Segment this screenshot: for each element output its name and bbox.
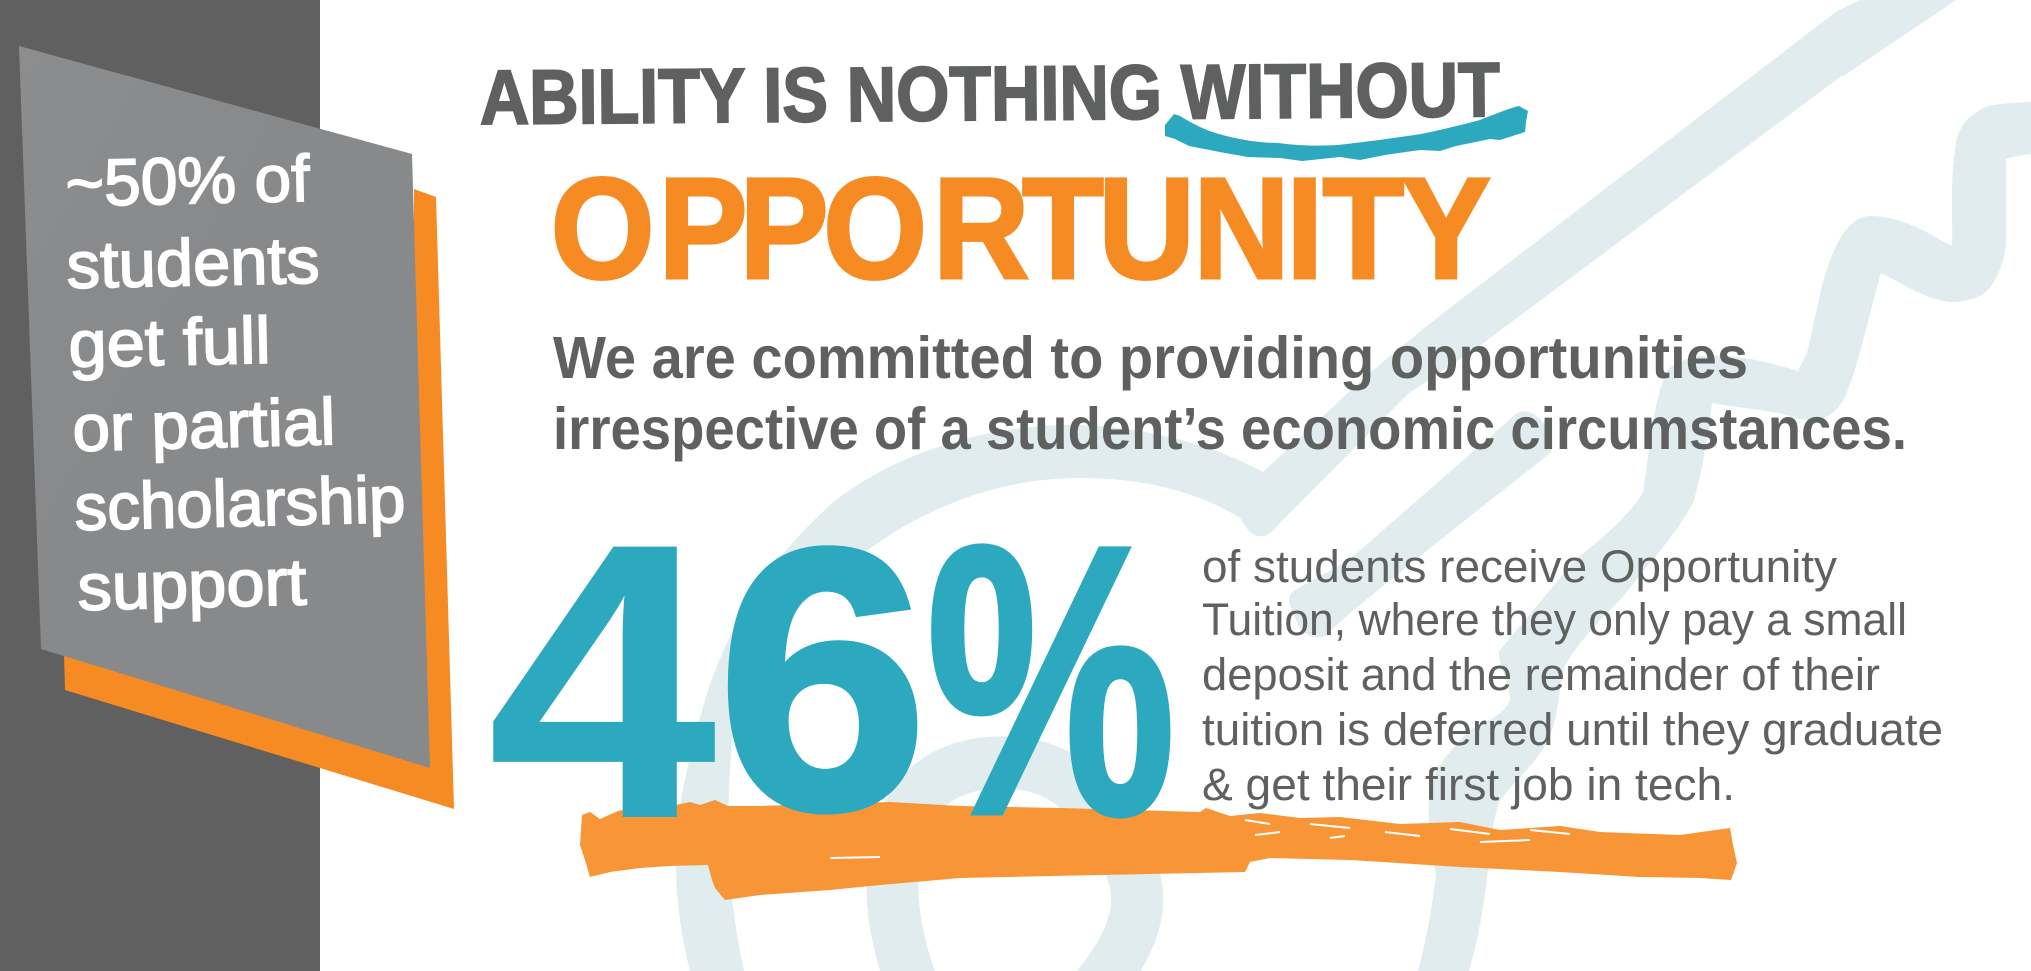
big statistic: 46%: 6 [717,471,928,887]
background stroke: diagonal line [1289,411,1553,638]
background stroke: large tick and arc [676,0,1956,971]
gray callout panel [19,46,430,768]
callout text: 50% scholarship support: scholarship [74,462,406,544]
commitment statement [553,325,1907,462]
callout text: 50% scholarship support: support [77,544,307,624]
teal brush underline [1165,106,1528,161]
opportunity tuition description: Tuition, where they only pay a small [1202,594,1907,645]
commitment statement: We are committed to providing opportunities [553,325,1748,391]
background stroke: inner loop [892,762,1137,971]
callout text: 50% scholarship support: ~50% of [65,141,311,220]
heading: opportunity: OPPORTUNITY [551,149,1491,309]
big statistic: 46%: 4 [487,462,720,901]
opportunity tuition description: tuition is deferred until they graduate [1202,704,1943,755]
opportunity tuition description: of students receive Opportunity [1202,541,1838,592]
callout text: 50% scholarship support: or partial [71,384,336,465]
big statistic: 46%: % [926,466,1176,895]
orange brush underline [580,800,1737,900]
callout text: 50% scholarship support: students [66,223,320,302]
background: hand-drawn chart lines [676,0,2031,971]
left dark panel [0,0,320,971]
heading: ability is nothing without: ABILITY IS NOTHING WITHOUT [479,47,1500,141]
opportunity tuition description: deposit and the remainder of their [1202,649,1880,700]
opportunity tuition description [1202,541,1943,810]
big statistic: 46% [487,462,1176,901]
callout text: 50% scholarship support [65,141,406,624]
background stroke: zigzag line [1418,102,2031,971]
callout text: 50% scholarship support: get full [68,303,271,381]
orange offset shadow shape [64,189,454,809]
opportunity tuition description: & get their first job in tech. [1202,759,1735,810]
commitment statement: irrespective of a student’s economic circumstances. [553,396,1907,462]
